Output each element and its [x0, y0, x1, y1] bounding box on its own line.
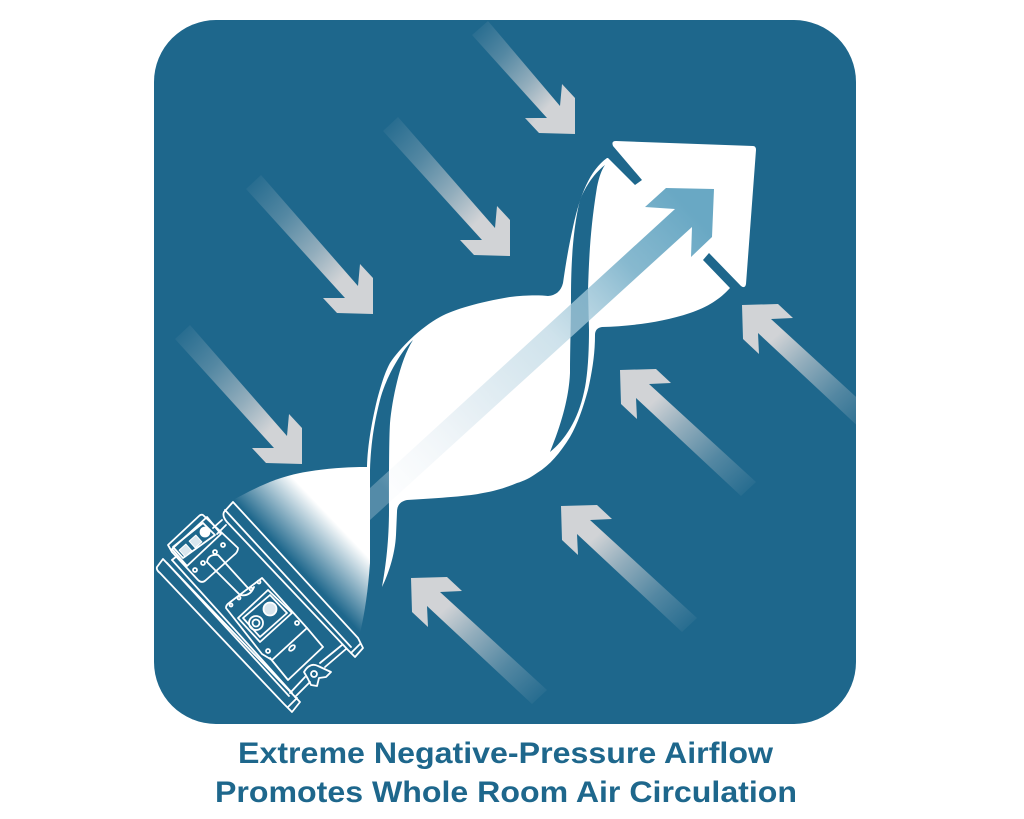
motor body — [270, 628, 323, 680]
control box with display — [168, 515, 238, 582]
arrow: up-left 3 — [620, 369, 756, 496]
infographic — [154, 20, 856, 802]
upper rail — [223, 502, 363, 657]
twisted airflow ribbon — [367, 141, 756, 587]
caption line 2: Promotes Whole Room Air Circulation — [215, 776, 797, 809]
arrow: down-right 3 — [246, 175, 373, 314]
caption — [215, 737, 797, 809]
panel: teal rounded background — [154, 20, 856, 724]
airflow cone from machine — [233, 467, 370, 633]
arrow: down-right 1 — [472, 21, 575, 134]
arrow: up-left 2 — [561, 505, 697, 632]
cross bars — [172, 520, 346, 697]
grey arrows converging on airflow — [175, 21, 878, 704]
caption line 1: Extreme Negative-Pressure Airflow — [238, 737, 774, 770]
machine line drawing — [157, 502, 363, 712]
wing nut — [304, 665, 331, 686]
arrow: up-left 4 — [742, 304, 856, 424]
arrow: up-left 1 — [411, 577, 547, 704]
central airflow arrow — [370, 188, 714, 520]
motor box with dials — [226, 578, 307, 660]
arrow: down-right 2 — [383, 117, 510, 256]
arrow: down-right 4 — [175, 325, 302, 464]
hose — [207, 555, 254, 595]
upper channel in ribbon — [550, 165, 605, 452]
lower rail — [157, 559, 300, 712]
